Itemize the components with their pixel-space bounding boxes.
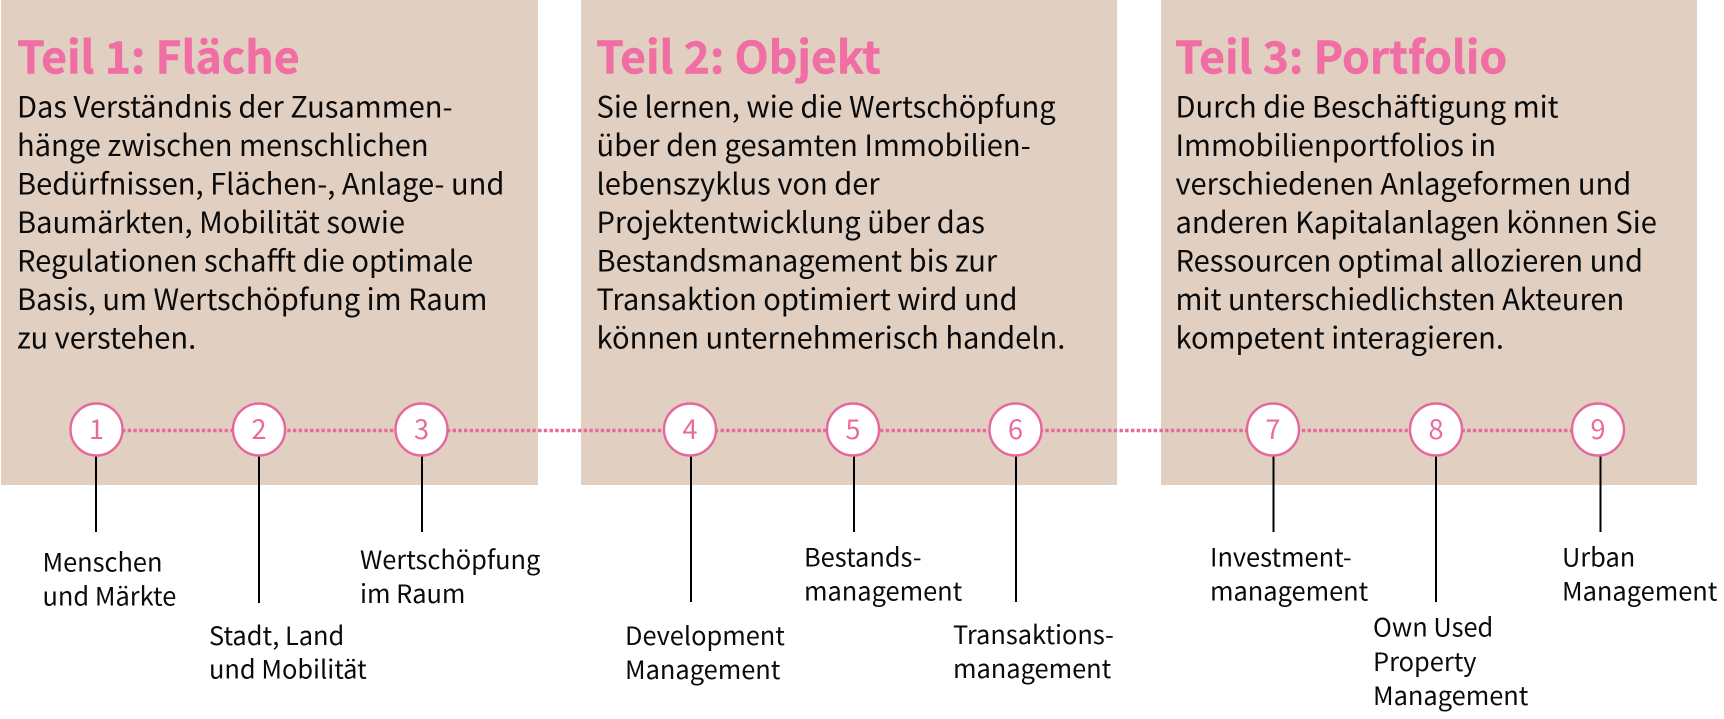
step 5: Bestands- — [804, 538, 922, 574]
step 5 — [804, 404, 963, 608]
text block: Teil 3: Immobilienportfolios in — [1176, 123, 1496, 165]
step 7: 7 — [1266, 408, 1280, 447]
step 7 — [1210, 404, 1369, 608]
text block: Teil 1: Regulationen schafft die optimale — [17, 238, 473, 280]
text block: Teil 1: Bedürfnissen, Flächen-, Anlage- und — [17, 162, 504, 204]
panel: Teil 3 Portfolio — [1161, 0, 1697, 485]
step 9: Urban — [1562, 538, 1635, 574]
step 6 — [953, 404, 1114, 686]
step 9: 9 — [1590, 408, 1606, 447]
heading: Teil 3: Teil 3: Portfolio — [1175, 22, 1507, 86]
text block: Teil 2: Sie lernen, wie die Wertschöpfung — [596, 84, 1056, 126]
step 2 — [209, 404, 367, 686]
text block: Teil 1: Basis, um Wertschöpfung im Raum — [17, 277, 487, 319]
step 8: Management — [1373, 677, 1529, 713]
step 3: 3 — [414, 408, 429, 447]
step 4: Development — [625, 617, 785, 653]
step 6: Transaktions- — [953, 616, 1114, 652]
step 8: Property — [1373, 643, 1476, 679]
step 7: Investment- — [1210, 538, 1352, 574]
text block: Teil 2: Bestandsmanagement bis zur — [596, 238, 998, 280]
text block: Teil 2: können unternehmerisch handeln. — [596, 316, 1065, 358]
step 9 — [1562, 404, 1718, 608]
panel: Teil 2 Objekt — [581, 0, 1117, 485]
text block: Teil 3: verschiedenen Anlageformen und — [1176, 162, 1631, 204]
step 5: management — [804, 572, 963, 608]
step 7: management — [1210, 572, 1369, 608]
text block: Teil 2 — [596, 84, 1065, 358]
text block: Teil 3: mit unterschiedlichsten Akteuren — [1176, 277, 1624, 319]
panel: Teil 1 Fläche — [1, 0, 538, 485]
step 3: im Raum — [360, 575, 465, 611]
timeline: dotted connector — [122, 429, 1572, 432]
step 3: Wertschöpfung — [360, 541, 540, 577]
heading: Teil 1: Teil 1: Fläche — [17, 22, 300, 86]
step 2: und Mobilität — [209, 650, 367, 686]
step 4: Management — [625, 651, 781, 687]
text block: Teil 2: lebenszyklus von der — [596, 162, 880, 204]
text block: Teil 3: Durch die Beschäftigung mit — [1176, 84, 1559, 126]
text block: Teil 3: kompetent interagieren. — [1176, 316, 1504, 358]
step 3 — [360, 404, 540, 611]
text block: Teil 2: Projektentwicklung über das — [596, 200, 985, 242]
text block: Teil 3 — [1176, 84, 1657, 358]
step 2: 2 — [252, 408, 266, 447]
step 4: 4 — [682, 408, 698, 447]
text block: Teil 3: Ressourcen optimal allozieren und — [1176, 238, 1643, 280]
step 1: 1 — [89, 408, 104, 447]
text block: Teil 3: anderen Kapitalanlagen können Sie — [1176, 200, 1657, 242]
text block: Teil 2: über den gesamten Immobilien- — [596, 123, 1031, 165]
step 8: 8 — [1428, 408, 1444, 447]
text block: Teil 1: hänge zwischen menschlichen — [17, 123, 429, 165]
step 5: 5 — [846, 408, 860, 447]
step 1 — [42, 404, 176, 614]
step 8 — [1373, 404, 1529, 713]
step 8: Own Used — [1373, 608, 1493, 644]
text block: Teil 1: Das Verständnis der Zusammen- — [17, 84, 453, 126]
text block: Teil 1 — [17, 84, 504, 358]
step 1: und Märkte — [42, 578, 176, 614]
text block: Teil 1: Baumärkten, Mobilität sowie — [17, 200, 405, 242]
step 2: Stadt, Land — [209, 617, 344, 653]
step 6: 6 — [1008, 408, 1023, 447]
step 6: management — [953, 650, 1112, 686]
text block: Teil 2: Transaktion optimiert wird und — [596, 277, 1018, 319]
step 1: Menschen — [42, 544, 162, 580]
step 4 — [625, 404, 785, 687]
heading: Teil 2: Teil 2: Objekt — [596, 22, 881, 86]
text block: Teil 1: zu verstehen. — [17, 316, 196, 358]
step 9: Management — [1562, 572, 1718, 608]
